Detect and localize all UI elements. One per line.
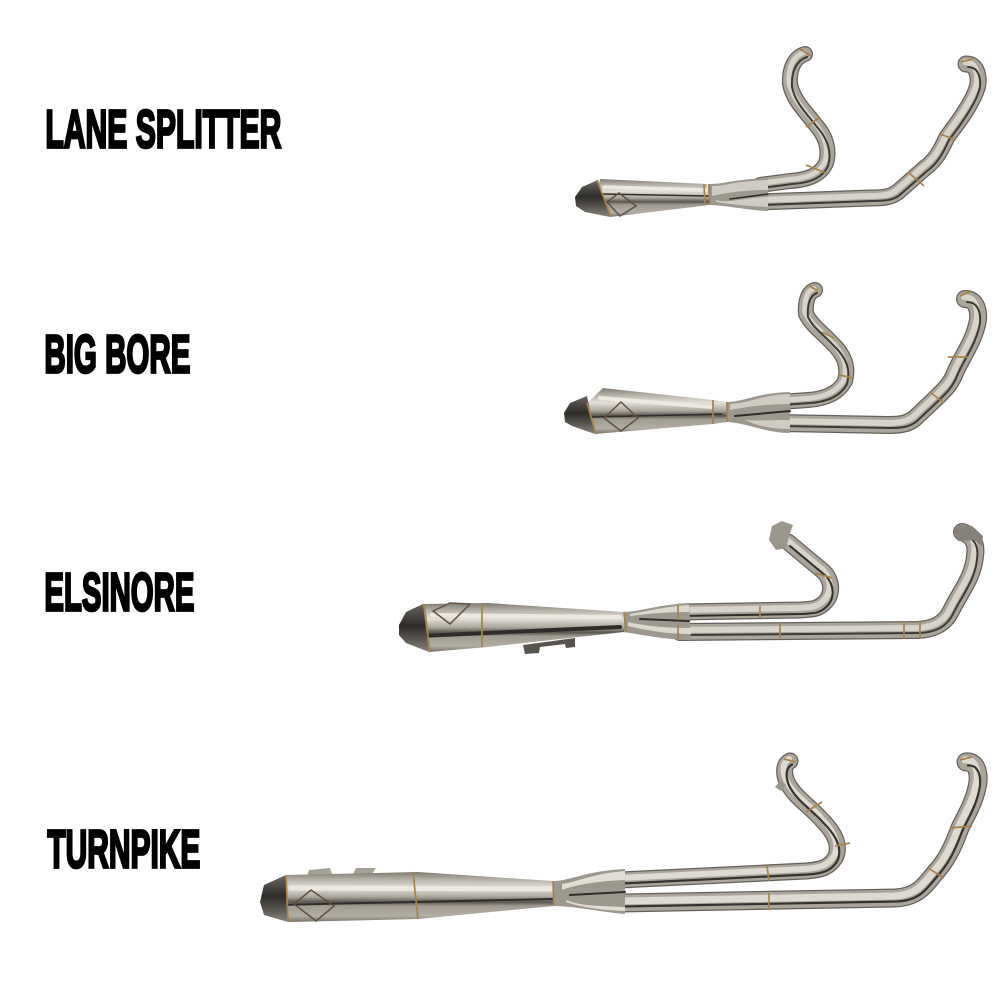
pipe flanges (769, 521, 983, 550)
heading: Lane Splitter: LANE SPLITTER (45, 101, 281, 160)
heading: Elsinore: ELSINORE (44, 564, 194, 623)
exhaust: Elsinore (399, 521, 983, 654)
heading: Turnpike: TURNPIKE (47, 821, 200, 880)
exhaust: Turnpike (260, 757, 980, 922)
heading: Big Bore: BIG BORE (44, 326, 190, 385)
exhaust: Lane Splitter (575, 49, 980, 217)
exhaust: Big Bore (564, 285, 980, 434)
